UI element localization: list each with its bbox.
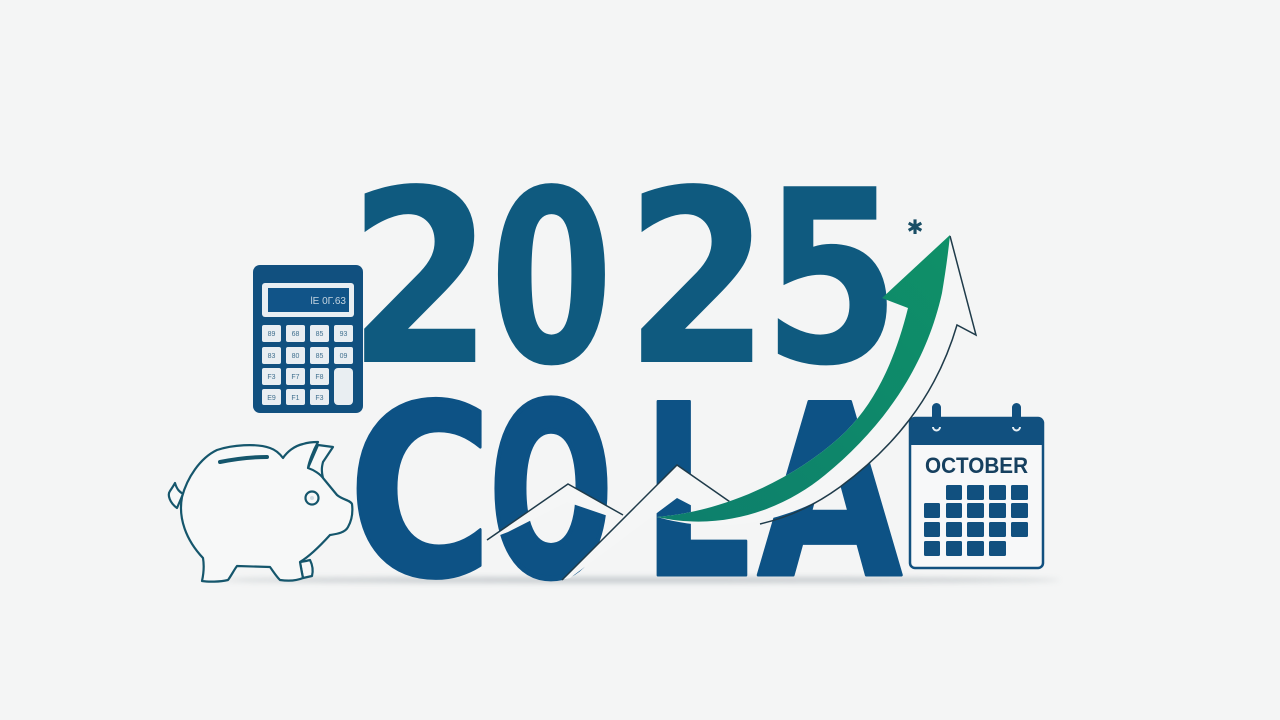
icon: calculator: 83 <box>268 353 275 360</box>
icon: calculator: 93 <box>340 331 347 338</box>
icon: calculator: 89 <box>268 331 275 338</box>
icon: calculator: E9 <box>267 395 276 402</box>
title: COLA <box>348 354 903 632</box>
arrow: green rising arrow <box>657 235 950 522</box>
title: 2025: 2 <box>348 139 493 420</box>
icon: calculator: 09 <box>340 353 347 360</box>
title: COLA: L <box>642 354 751 631</box>
title: 2025: 5 <box>762 139 901 420</box>
icon: calculator: F3 <box>315 395 324 402</box>
icon: calculator: 68 <box>292 331 299 338</box>
icon: calculator: 80 <box>292 353 299 360</box>
icon: calculator: F3 <box>267 374 276 381</box>
icon: calculator: 85 <box>316 331 323 338</box>
icon: calculator: F8 <box>315 374 324 381</box>
icon: calendar october <box>910 403 1043 568</box>
icon: calculator: 85 <box>316 353 323 360</box>
asterisk mark: ✱ <box>907 215 923 239</box>
icon: calculator <box>253 265 363 413</box>
icon: calendar october: OCTOBER <box>925 453 1028 478</box>
title: COLA: A <box>757 354 903 632</box>
title: 2025: 2 <box>625 139 770 420</box>
icon: calculator: F7 <box>291 374 300 381</box>
icon: piggy bank <box>169 442 352 582</box>
title: 2025: 0 <box>489 138 613 419</box>
arrow: white outline zigzag trend line <box>487 236 976 580</box>
icon: calculator: F1 <box>291 395 300 402</box>
title: COLA: O <box>489 354 613 632</box>
title: COLA: C <box>348 354 493 632</box>
icon: calculator: lE 0Γ.63 <box>310 296 346 307</box>
title: 2025 <box>348 138 901 420</box>
ground shadow <box>220 578 1060 582</box>
